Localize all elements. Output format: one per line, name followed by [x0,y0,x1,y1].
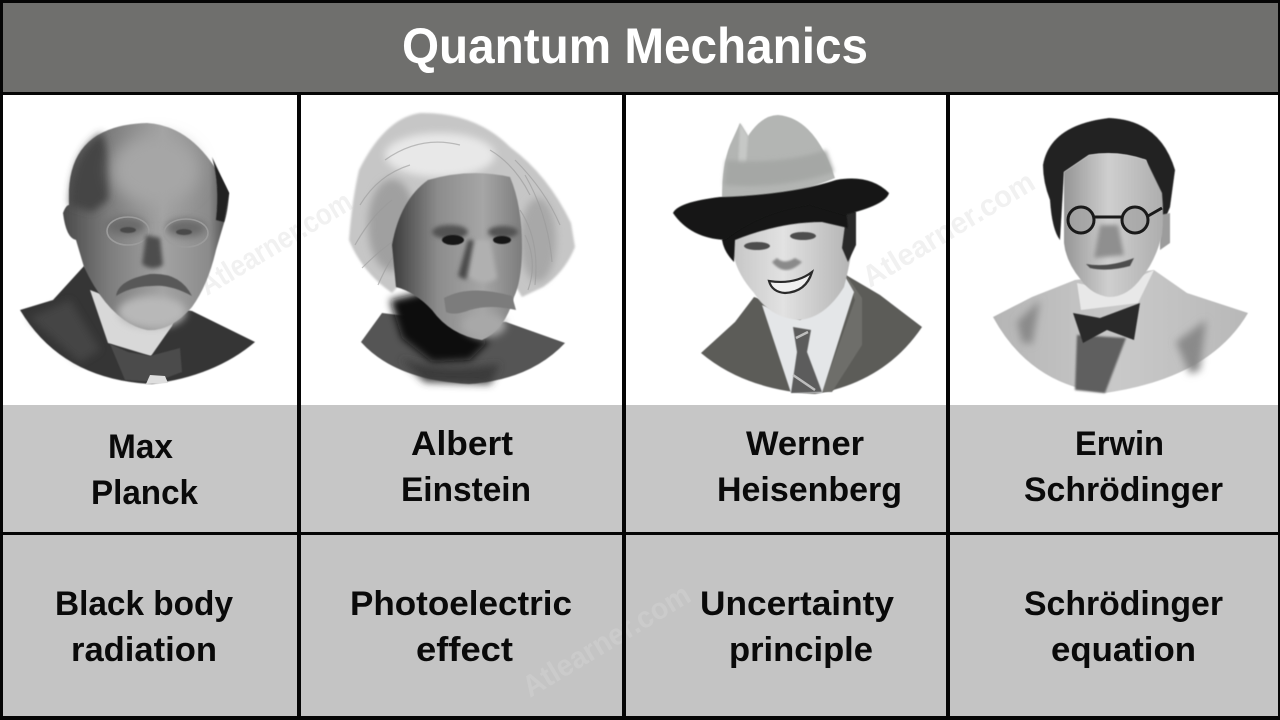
sweater [361,313,565,384]
shirt front [146,375,168,384]
jacket sheen [30,300,100,362]
panel: name row background [3,405,1278,533]
discovery: Schrodinger equation: Schrödinger [1024,585,1223,623]
shirt collar [1077,270,1154,310]
portrait: Werner Heisenberg [673,115,922,394]
lower face highlight [118,296,186,328]
name: Erwin Schrodinger: Erwin [1075,425,1164,463]
shirt collar [90,290,178,356]
eyes [120,227,192,235]
coat [701,275,922,394]
name: Max Planck: Max [108,428,173,466]
jacket [993,270,1248,393]
panel: discovery row background [3,534,1278,716]
eyes [442,235,511,245]
discovery: Uncertainty principle: Uncertainty [700,585,894,623]
shirt [762,278,854,393]
crown crease [738,123,748,170]
forehead highlight [111,136,199,204]
name: Erwin Schrodinger [1024,425,1223,509]
vest [1075,335,1126,393]
discovery: Uncertainty principle: principle [729,631,873,669]
lapel shadows [1017,300,1206,374]
hair strands [355,142,560,290]
watermark: portrait row left: Atlearner.com [194,185,358,302]
watermark: portrait row right: Atlearner.com [857,165,1041,294]
name: Max Planck [91,428,198,512]
jacket [20,266,255,384]
title: Quantum Mechanics [402,18,868,74]
name: Erwin Schrodinger: Schrödinger [1024,471,1223,509]
hat brim [673,179,889,240]
name: Albert Einstein: Albert [411,425,513,463]
discovery: Photoelectric effect: effect [416,631,513,669]
dark left skull [70,133,109,212]
mustache [116,274,192,296]
nose side shadow [458,240,474,280]
face [1064,153,1163,297]
discovery: Uncertainty principle [700,585,894,669]
sweater collar dark [400,358,500,384]
hair below brim [722,200,848,262]
hair shadow right [520,198,556,282]
portrait: Erwin Schrodinger [993,118,1248,393]
eyes [744,232,816,250]
nose shadow [1094,225,1124,258]
bow tie [1073,303,1140,343]
hair highlight [385,133,495,177]
watermark: lower row: Atlearner.com [517,578,696,704]
hair [1043,118,1175,240]
hair shadow left [368,179,416,271]
name: Albert Einstein: Einstein [401,471,531,509]
mouth [1086,258,1134,270]
hair [349,113,575,297]
glasses [107,217,208,247]
discovery: Black body radiation [55,585,233,669]
nose shadow [772,258,802,270]
tie stripes [793,332,815,390]
mustache [444,290,516,314]
dark right side hair [212,157,229,222]
hat crown [722,115,835,197]
name: Werner Heisenberg: Heisenberg [717,471,902,509]
hat band [724,150,834,186]
brow shadows [432,225,518,239]
round glasses [1068,207,1162,233]
eye sockets [106,217,206,237]
discovery: Black body radiation: Black body [55,585,233,623]
nose [468,240,497,283]
discovery: Black body radiation: radiation [71,631,217,669]
nose shadow [142,235,163,268]
smile [769,272,812,293]
dark neck and chest [390,290,490,362]
header bar [3,3,1278,92]
discovery: Photoelectric effect [350,585,572,669]
ear right [1160,213,1170,250]
ear and hair sides [842,205,856,262]
name: Albert Einstein [401,425,531,509]
name: Max Planck: Planck [91,474,198,512]
coat collar right [822,275,862,392]
name: Werner Heisenberg [717,425,902,509]
head [63,123,229,330]
face [726,205,853,320]
necktie [791,327,822,393]
portrait: Albert Einstein [349,113,575,384]
discovery: Schrodinger equation [1024,585,1223,669]
discovery: Photoelectric effect: Photoelectric [350,585,572,623]
portrait: Max Planck [20,123,255,384]
discovery: Schrodinger equation: equation [1051,631,1196,669]
chin [462,313,506,337]
bow tie [110,344,182,382]
name: Werner Heisenberg: Werner [746,425,864,463]
face [392,173,522,340]
